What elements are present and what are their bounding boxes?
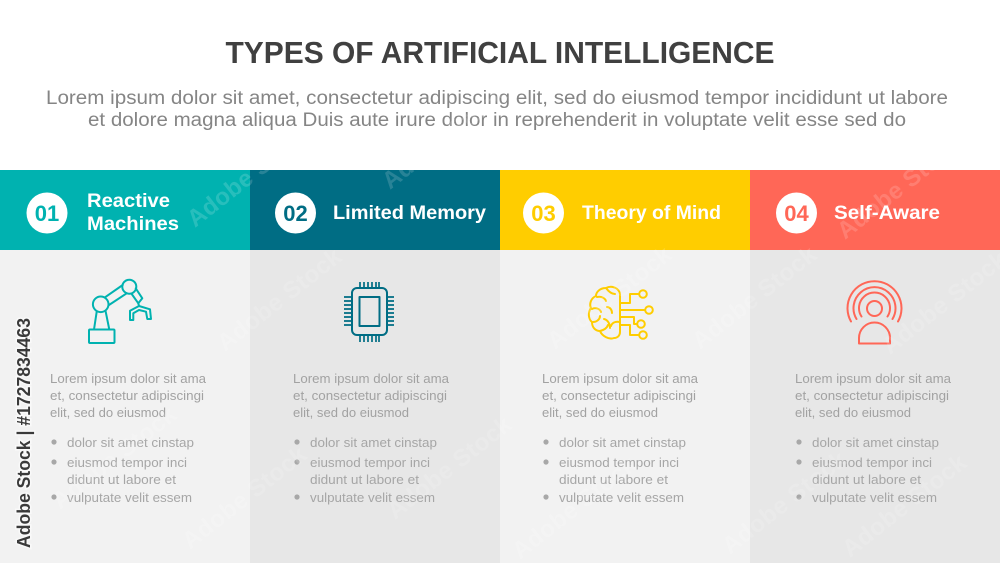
heading 01: Reactive: [87, 191, 170, 212]
number badge 04: 04: [784, 201, 809, 226]
description 01: [50, 371, 207, 420]
watermark pattern: Adobe Stock: [182, 119, 317, 233]
number badge 03: [523, 192, 564, 234]
panel body 04: [750, 250, 1000, 563]
watermark pattern: Adobe Stock: [687, 241, 822, 355]
panel: 04 Self-Aware: [750, 170, 1000, 563]
bullet list 03: vulputate velit essem: [559, 490, 684, 505]
bullet list 03: eiusmod tempor inci: [559, 455, 679, 470]
number badge 03: 03: [531, 201, 556, 226]
watermark pattern: Adobe Stock: [382, 411, 517, 525]
bullet list 04: [796, 435, 939, 505]
bullet list 02: vulputate velit essem: [310, 490, 435, 505]
description 04: elit, sed do eiusmod: [795, 405, 911, 420]
number badge 01: [26, 192, 68, 234]
panel: 01 Reactive Machines: [0, 170, 250, 563]
icon: robot arm: [89, 280, 151, 343]
bullet list 03: [543, 435, 686, 505]
panel body 03: [500, 250, 750, 563]
header 03: [500, 170, 750, 250]
watermark pattern: Adobe Stock: [837, 449, 972, 563]
description 03: elit, sed do eiusmod: [542, 405, 658, 420]
bullet list 03: didunt ut labore et: [559, 472, 668, 487]
description 02: elit, sed do eiusmod: [293, 405, 409, 420]
watermark pattern: Adobe Stock: [377, 81, 512, 195]
description 03: [542, 371, 699, 420]
watermark pattern: Adobe Stock: [832, 131, 967, 245]
description 04: et, consectetur adipiscingi: [795, 388, 949, 403]
bullet list 02: didunt ut labore et: [310, 472, 419, 487]
title: TYPES OF ARTIFICIAL INTELLIGENCE: [226, 36, 774, 70]
description 02: Lorem ipsum dolor sit ama: [293, 371, 450, 386]
bullet list 03: dolor sit amet cinstap: [559, 435, 686, 450]
watermark pattern: Adobe Stock: [507, 451, 642, 563]
header 02: [250, 170, 500, 250]
number badge 02: [275, 192, 316, 234]
description 01: Lorem ipsum dolor sit ama: [50, 371, 207, 386]
panel: 02 Limited Memory: [250, 170, 500, 563]
bullet list 04: dolor sit amet cinstap: [812, 435, 939, 450]
subtitle: Lorem ipsum dolor sit amet, consectetur adipiscing elit, sed do eiusmod tempor incididunt ut labore: [46, 88, 948, 109]
bullet list 04: eiusmod tempor inci: [812, 455, 932, 470]
panel body 02: [250, 250, 500, 563]
subtitle: et dolore magna aliqua Duis aute irure dolor in reprehenderit in voluptate velit esse sed do: [88, 110, 906, 131]
watermark pattern: Adobe Stock: [47, 401, 182, 515]
bullet list 01: [51, 435, 194, 505]
description 02: et, consectetur adipiscingi: [293, 388, 447, 403]
heading 01: [87, 191, 179, 235]
number badge 02: 02: [283, 201, 308, 226]
watermark pattern: Adobe Stock: [717, 446, 852, 560]
bullet list 01: didunt ut labore et: [67, 472, 176, 487]
bullet list 01: dolor sit amet cinstap: [67, 435, 194, 450]
number badge 04: [776, 192, 817, 234]
bullet list 04: vulputate velit essem: [812, 490, 937, 505]
watermark pattern: Adobe Stock: [177, 441, 312, 555]
heading 03: Theory of Mind: [582, 203, 721, 224]
heading 04: Self-Aware: [834, 203, 940, 224]
heading 01: Machines: [87, 214, 179, 235]
stock id vertical text: Adobe Stock | #1727834463: [14, 318, 34, 548]
bullet list 02: [294, 435, 437, 505]
description 01: et, consectetur adipiscingi: [50, 388, 204, 403]
heading 02: Limited Memory: [333, 203, 486, 224]
watermark pattern: Adobe Stock: [212, 243, 347, 357]
watermark pattern: Adobe Stock: [542, 241, 677, 355]
bullet list 04: didunt ut labore et: [812, 472, 921, 487]
icon: microchip: [344, 282, 394, 342]
description 03: et, consectetur adipiscingi: [542, 388, 696, 403]
bullet list 02: dolor sit amet cinstap: [310, 435, 437, 450]
description 04: [795, 371, 952, 420]
icon: person with signal arcs: [848, 281, 902, 344]
panel body 01: [0, 250, 250, 563]
bullet list 01: vulputate velit essem: [67, 490, 192, 505]
description 04: Lorem ipsum dolor sit ama: [795, 371, 952, 386]
bullet list 02: eiusmod tempor inci: [310, 455, 430, 470]
number badge 01: 01: [35, 201, 59, 226]
panel: 03 Theory of Mind: [500, 170, 750, 563]
header 04: [750, 170, 1000, 250]
description 01: elit, sed do eiusmod: [50, 405, 166, 420]
description 02: [293, 371, 450, 420]
icon: brain with circuits: [589, 287, 653, 339]
bullet list 01: eiusmod tempor inci: [67, 455, 187, 470]
header 01: [0, 170, 250, 250]
subtitle: [46, 88, 948, 131]
description 03: Lorem ipsum dolor sit ama: [542, 371, 699, 386]
